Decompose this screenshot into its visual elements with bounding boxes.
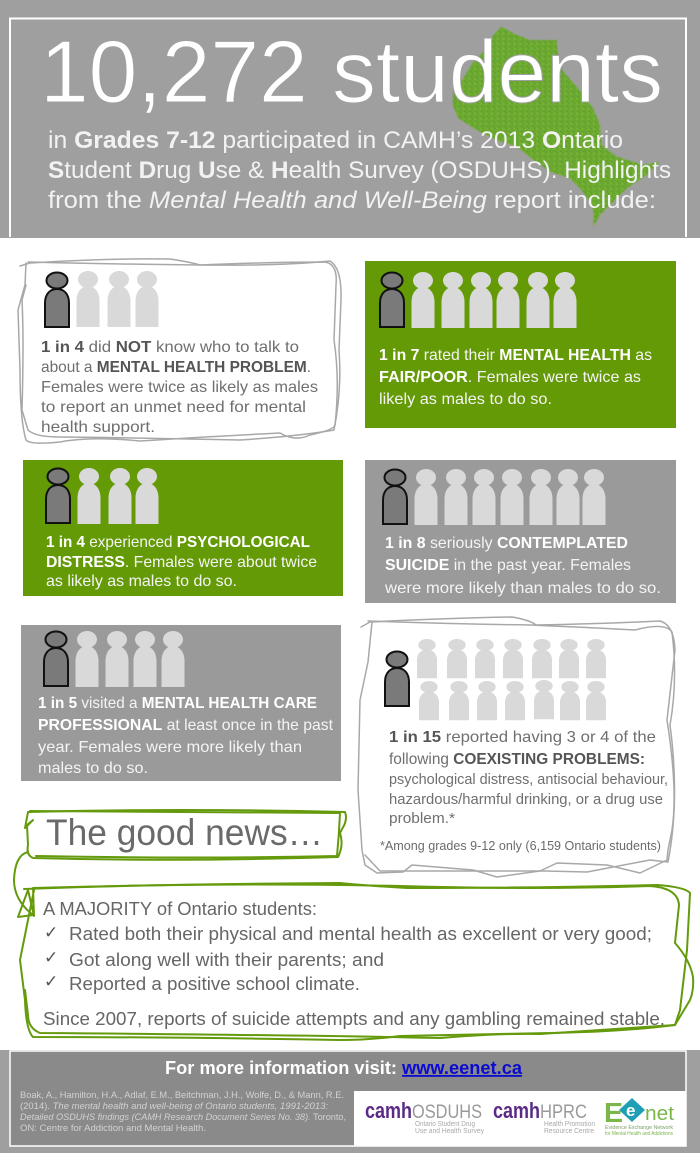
- text: 1 in 4 did not know: about a MENTAL HEALTH PROBLEM.: [41, 359, 311, 376]
- text: 1 in 4 did not know: [41, 339, 318, 436]
- text: 1 in 4 did not know: to report an unmet need for mental: [41, 399, 306, 416]
- logo: camh HPRC: HPRC: [540, 1102, 587, 1123]
- text: 1 in 7 rated: 1 in 7 rated their MENTAL HEALTH as: [379, 347, 652, 364]
- text: 1 in 4 did not know: Females were twice as likely as males: [41, 379, 318, 396]
- icon: 1 in 15 people: [385, 639, 606, 720]
- panel: psychological distress: [23, 460, 343, 596]
- citation: ON: Centre for Addiction and Mental Health.: [20, 1123, 206, 1134]
- text: 1 in 5 visited: year. Females were more likely than: [38, 739, 302, 756]
- logo: camh HPRC: camh: [493, 1098, 540, 1123]
- text: 1 in 15 reported: 1 in 15 reported having 3 or 4 of the: [389, 729, 656, 746]
- text: 1 in 7 rated: FAIR/POOR. Females were twice as: [379, 369, 641, 386]
- icon: 1 in 4 people: [45, 271, 158, 327]
- text: 1 in 15 reported: hazardous/harmful drinking, or a drug use: [389, 792, 663, 808]
- citation: (2014). The mental health and well-being of Ontario students, 1991-2013:: [20, 1101, 328, 1112]
- icon: 1 in 8 people: [383, 469, 606, 525]
- list item: parents: Got along well with their parents; and: [69, 950, 384, 970]
- citation: Detailed OSDUHS findings (CAMH Research Document Series No. 38). Toronto,: [20, 1112, 346, 1123]
- map of Ontario: [453, 27, 660, 227]
- logo: camh HPRC: Resource Centre: [544, 1128, 594, 1135]
- footer: [0, 1050, 700, 1153]
- text: 1 in 15 reported: [389, 729, 668, 827]
- text: 1 in 7 rated: [379, 347, 652, 408]
- icon: 1 in 4 people: [46, 468, 158, 524]
- text: 1 in 4 experienced: DISTRESS. Females were about twice: [46, 554, 317, 571]
- logo: camh OSDUHS: Ontario Student Drug: [415, 1121, 475, 1128]
- citation: [20, 1090, 346, 1134]
- citation: Boak, A., Hamilton, H.A., Adlaf, E.M., Beitchman, J.H., Wolfe, D., & Mann, R.E.: [20, 1090, 344, 1101]
- text: 1 in 8 seriously: 1 in 8 seriously CONTEMPLATED: [385, 535, 628, 552]
- text: 1 in 4 did not know: 1 in 4 did NOT know who to talk to: [41, 339, 299, 356]
- list item: physical and mental health: Rated both their physical and mental health as excellent or very good;: [69, 924, 652, 944]
- logo: EENet: E: [604, 1097, 623, 1128]
- logo: EENet: [604, 1097, 674, 1137]
- panel: did not know who to talk to: [18, 259, 341, 443]
- text: 1 in 8 seriously: SUICIDE in the past year. Females: [385, 557, 631, 574]
- logo: EENet: for Mental Health and Addictions: [605, 1131, 673, 1137]
- list item: school climate: Reported a positive school climate.: [69, 974, 360, 994]
- logo: camh OSDUHS: [365, 1098, 484, 1135]
- logo panel: [354, 1091, 686, 1146]
- text: 1 in 7 rated: likely as males to do so.: [379, 391, 552, 408]
- more information link: For more information visit: www.eenet.ca: [165, 1058, 523, 1078]
- logo: EENet: net: [645, 1103, 674, 1125]
- icon: 1 in 5 people: [44, 631, 184, 687]
- logo: camh HPRC: [493, 1098, 595, 1135]
- panel: visited a mental health care professional: [21, 625, 341, 781]
- text: 1 in 4 experienced: [46, 534, 317, 590]
- text: 1 in 5 visited: 1 in 5 visited a MENTAL HEALTH CARE: [38, 695, 317, 712]
- logo: EENet: Evidence Exchange Network: [605, 1125, 674, 1131]
- logo: EENet: e: [626, 1101, 635, 1120]
- text: 1 in 15 reported: psychological distress, antisocial behaviour,: [389, 772, 668, 788]
- text: 1 in 5 visited: [38, 695, 334, 777]
- text: 1 in 15 reported: following COEXISTING PROBLEMS:: [389, 751, 645, 768]
- intro text: Student Drug Use & Health Survey (OSDUHS). Highlights: [48, 157, 671, 184]
- text: 1 in 4 experienced: as likely as males to do so.: [46, 573, 237, 590]
- panel: coexisting problems: [358, 617, 675, 877]
- list item: school climate: ✓: [44, 972, 58, 991]
- panel: good news list: [14, 852, 693, 1040]
- text: 1 in 5 visited: males to do so.: [38, 760, 148, 777]
- intro text: in Grades 7-12 participated in CAMH’s 2013 Ontario: [48, 127, 623, 154]
- footnote: *Among grades 9-12 only (6,159 Ontario students): [380, 839, 661, 853]
- text: 1 in 8 seriously: [384, 535, 661, 597]
- header band: [0, 0, 700, 238]
- list item: parents: ✓: [44, 948, 58, 967]
- text: 1 in 4 experienced: 1 in 4 experienced PSYCHOLOGICAL: [46, 534, 310, 551]
- panel: rated mental health fair/poor: [365, 261, 676, 428]
- logo: camh OSDUHS: OSDUHS: [412, 1102, 482, 1123]
- panel: contemplated suicide: [365, 460, 676, 603]
- title: 10,272 students: [40, 22, 663, 121]
- intro text: [48, 127, 671, 214]
- logo: camh OSDUHS: Use and Health Survey: [415, 1128, 484, 1135]
- logo: camh OSDUHS: camh: [365, 1098, 412, 1123]
- heading: the good news: The good news…: [46, 812, 323, 853]
- logo: camh HPRC: Health Promotion: [544, 1121, 595, 1128]
- text: since 2007: Since 2007, reports of suicide attempts and any gambling remained stable.: [43, 1009, 665, 1029]
- text: 1 in 4 did not know: health support.: [41, 419, 155, 436]
- text: majority intro: A MAJORITY of Ontario students:: [43, 899, 317, 919]
- intro text: from the Mental Health and Well-Being report include:: [48, 187, 656, 214]
- list item: physical and mental health: ✓: [44, 923, 58, 942]
- icon: 1 in 7 people: [380, 272, 576, 328]
- text: 1 in 5 visited: PROFESSIONAL at least once in the past: [38, 717, 334, 734]
- text: 1 in 8 seriously: were more likely than males to do so.: [384, 580, 661, 597]
- text: 1 in 15 reported: problem.*: [389, 811, 455, 827]
